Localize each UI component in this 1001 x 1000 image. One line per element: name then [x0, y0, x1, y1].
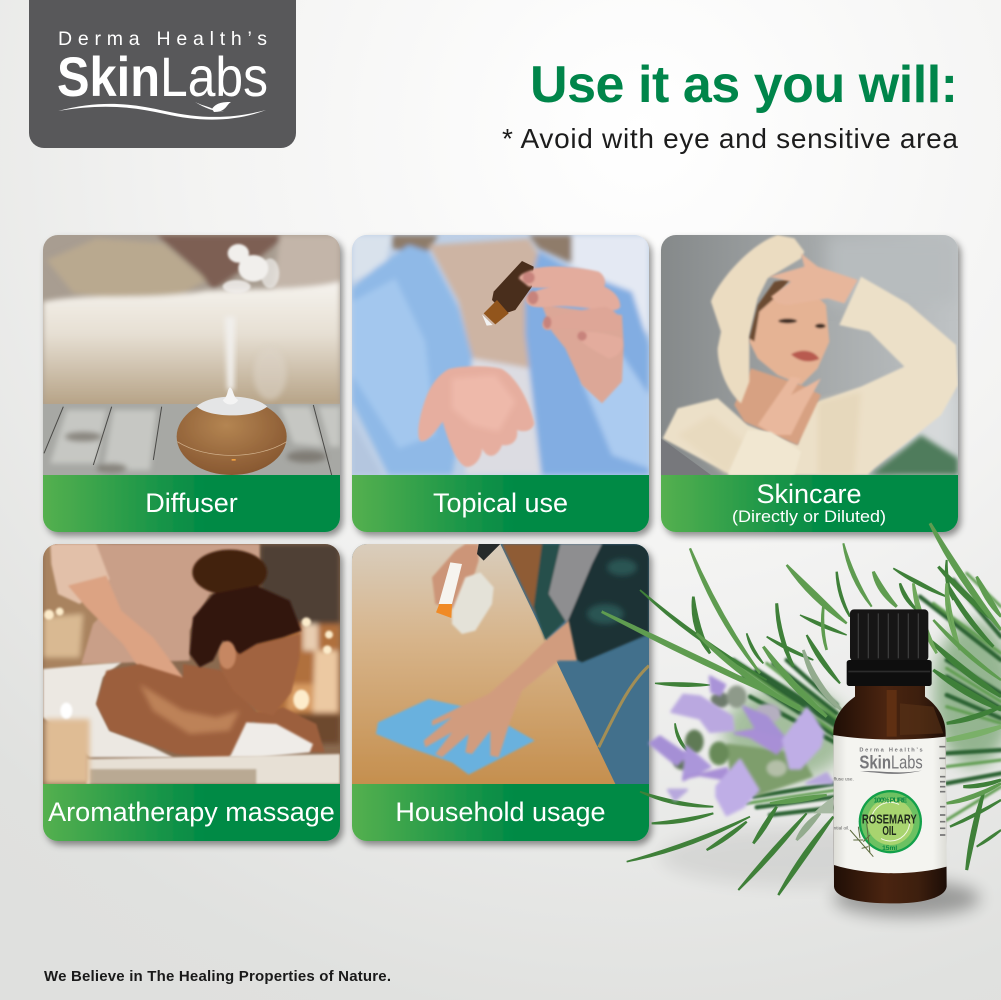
fingertips over bottle [519, 268, 587, 341]
label logo: Derma Health’s [859, 748, 923, 754]
label: Household usage [352, 784, 649, 841]
label: Diffuser: Diffuser [145, 488, 238, 518]
mid needles [602, 523, 1001, 803]
bottle [833, 609, 980, 917]
label badge: 100% PURE [874, 796, 907, 805]
label [833, 735, 947, 873]
lavender flowers [650, 677, 833, 815]
logo panel [29, 0, 296, 148]
towel on head [711, 235, 804, 403]
shirt sleeve [50, 544, 110, 604]
photo: aromatherapy massage [43, 544, 340, 784]
soft foliage glow [723, 620, 1001, 780]
massage bed [86, 754, 340, 784]
label badge: 15ml [882, 845, 897, 852]
label: Topical use [352, 475, 649, 532]
label: Skincare: Skincare [756, 479, 862, 509]
logo swoosh and leaf [58, 102, 266, 120]
therapist arm [68, 576, 183, 689]
photo: topical use [352, 235, 649, 475]
woman back and arm [96, 664, 325, 759]
arm and hand on cloth [376, 621, 577, 775]
rosemary sprig with flowers and bottle [602, 523, 1001, 917]
panel: household usage [352, 544, 649, 841]
panel: diffuser [43, 235, 340, 532]
pale leaves [797, 650, 842, 840]
lower open hand [418, 366, 534, 467]
lower hand [758, 377, 821, 435]
therapist shirt [53, 544, 260, 664]
label logo: Labs [891, 751, 923, 772]
label side lines [939, 747, 945, 835]
logo text: Derma Health's: Derma Health’s [58, 28, 267, 50]
photo: skincare [661, 235, 958, 475]
panel: aromatherapy massage [43, 544, 340, 841]
panel: topical use [352, 235, 649, 532]
flower petals [650, 677, 833, 815]
spray bottle and hand [432, 544, 500, 634]
logo text: SkinLabs: Labs [160, 45, 268, 108]
rolled towel [230, 722, 313, 757]
label: Skincare: (Directly or Diluted) [732, 507, 886, 526]
rosemary shadow [660, 827, 940, 887]
cap [847, 609, 932, 686]
label sprig [850, 823, 873, 857]
robe [663, 277, 958, 475]
label: Aromatherapy massage [43, 784, 340, 841]
flower buds [674, 685, 813, 797]
diffuser device [176, 407, 287, 475]
label badge [859, 790, 922, 853]
vapor [223, 244, 287, 400]
upper hand [519, 267, 624, 403]
ear [219, 641, 236, 669]
dropper bottle [482, 261, 534, 326]
panel: skincare [661, 235, 958, 532]
chest and neck [734, 368, 821, 445]
logo text: SkinLabs: Skin [57, 45, 160, 108]
photo: household usage [352, 544, 649, 784]
label badge: OIL [882, 824, 897, 838]
wooden table [352, 544, 615, 784]
foreground candle [45, 703, 90, 784]
label: Skincare [661, 475, 958, 532]
label logo [859, 748, 923, 774]
woman face [220, 634, 300, 716]
bottle shadow [833, 880, 980, 917]
woman hair [190, 550, 301, 667]
title: Use it as you will: [530, 56, 958, 114]
background behind table [502, 544, 649, 662]
label side text: ffuse use. [834, 777, 854, 782]
label side text [834, 777, 854, 830]
sleeve cuff [728, 430, 801, 475]
label logo: Skin [859, 751, 891, 772]
photo: diffuser [43, 235, 340, 475]
face [749, 278, 829, 385]
dark needles [627, 560, 1001, 895]
label: Aromatherapy massage: Aromatherapy massage [48, 797, 335, 827]
label: Diffuser [43, 475, 340, 532]
label side text: ntial oil. [834, 825, 849, 830]
footer tagline: We Believe in The Healing Properties of Nature. [44, 968, 391, 985]
label: Household usage: Household usage [395, 797, 606, 827]
label badge: ROSEMARY [862, 812, 917, 826]
towel on body [43, 662, 173, 757]
logo text: SkinLabs [57, 45, 268, 108]
dense stems behind flowers [733, 573, 1001, 820]
subtitle: * Avoid with eye and sensitive area [502, 123, 958, 154]
label: Topical use: Topical use [433, 488, 568, 518]
glass body [833, 686, 947, 903]
upper hand [769, 253, 858, 305]
